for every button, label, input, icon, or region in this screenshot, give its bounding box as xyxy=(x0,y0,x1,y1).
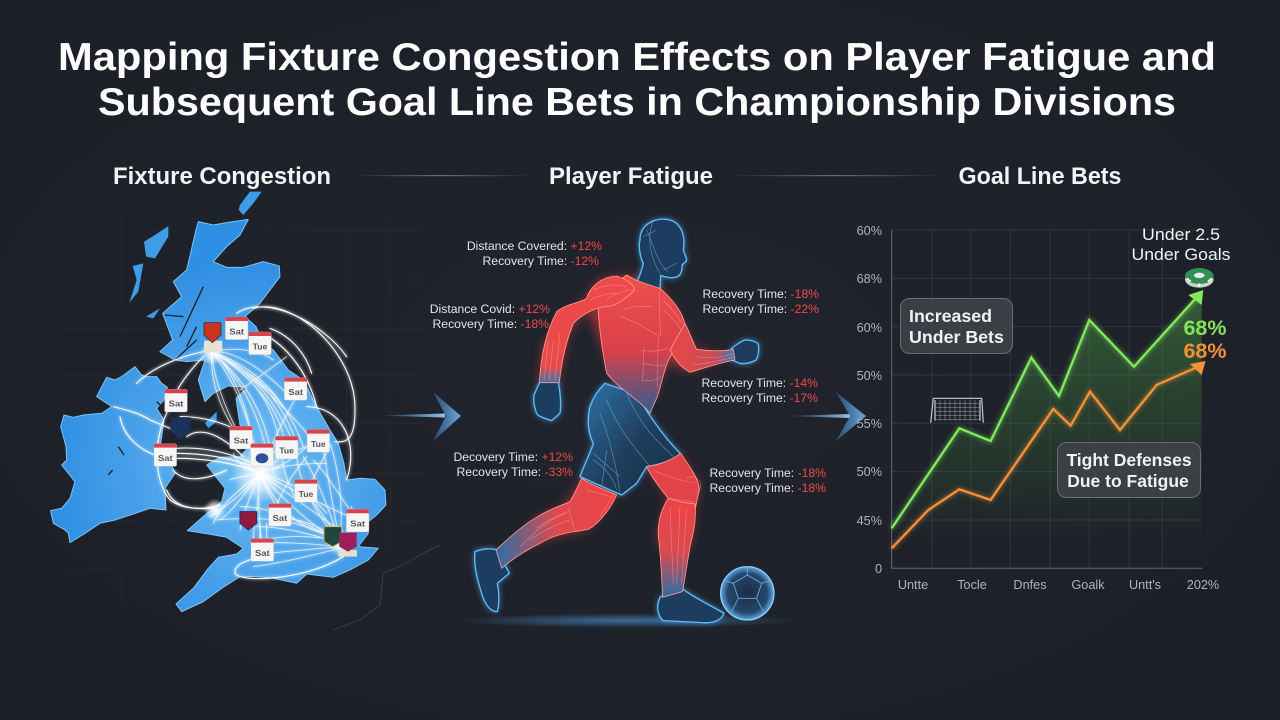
y axis labels: 55% xyxy=(857,417,882,431)
stat: mid right xyxy=(702,376,818,405)
y axis labels: 50% xyxy=(857,465,882,479)
faint lightning line xyxy=(333,545,440,630)
panel: goal line chart xyxy=(857,224,1230,592)
stat: lower right: Recovery Time: -18% xyxy=(710,481,826,495)
stat: mid left: Recovery Time: -18% xyxy=(432,317,549,331)
calendar markers: Sat xyxy=(350,520,365,529)
hub glows xyxy=(200,341,354,558)
x axis labels: Untte xyxy=(898,578,928,592)
y axis labels: 45% xyxy=(857,514,882,528)
stat: lower left: Decovery Time: +12% xyxy=(453,450,573,464)
title: Mapping Fixture Congestion Effects on Player Fatigue and xyxy=(58,36,1216,79)
arrow: map to runner xyxy=(378,392,461,441)
x axis labels xyxy=(898,578,1219,592)
stat: lower left: Recovery Time: -33% xyxy=(456,465,573,479)
chart grid xyxy=(892,230,1202,568)
callout: increased under bets: Under Bets xyxy=(909,327,1004,347)
x axis labels: Tocle xyxy=(957,578,987,592)
y axis labels: 0 xyxy=(875,562,882,576)
callout: increased under bets: Increased xyxy=(909,306,992,326)
calendar markers: Tue xyxy=(253,342,268,351)
stat: mid left xyxy=(430,302,550,331)
area under green line xyxy=(892,292,1202,543)
x axis labels: Untt's xyxy=(1129,578,1161,592)
callout: tight defenses: Due to Fatigue xyxy=(1067,471,1189,491)
calendar markers: Tue xyxy=(299,490,314,499)
muscle lines xyxy=(520,220,733,583)
arrow: runner to chart xyxy=(785,392,866,441)
stat: lower right: Recovery Time: -18% xyxy=(710,466,826,480)
stat: top left: Distance Covered: +12% xyxy=(467,239,602,253)
value: orange 68%: 68% xyxy=(1183,339,1227,363)
title: Subsequent Goal Line Bets in Championship Divisions xyxy=(98,81,1176,124)
icon: betting chip xyxy=(1185,268,1214,288)
red glow xyxy=(520,275,727,550)
stat: top right: Recovery Time: -22% xyxy=(702,302,819,316)
stat: top left: Recovery Time: -12% xyxy=(482,254,599,268)
y axis labels: 68% xyxy=(857,272,882,286)
map: hebrides xyxy=(129,192,262,428)
stat labels xyxy=(430,239,826,495)
callout: tight defenses: Tight Defenses xyxy=(1066,450,1192,470)
calendar markers: Tue xyxy=(311,440,326,449)
calendar markers: Sat xyxy=(158,454,173,463)
label: under 2.5 goals xyxy=(1132,226,1230,264)
red muscles xyxy=(496,275,735,597)
club badges xyxy=(171,323,357,557)
stat: lower left xyxy=(453,450,573,479)
y axis labels: 60% xyxy=(857,224,882,238)
label: under 2.5 goals: Under 2.5 xyxy=(1142,226,1220,244)
y axis labels: 60% xyxy=(857,321,882,335)
calendar markers: Sat xyxy=(255,549,270,558)
value: green 68%: 68% xyxy=(1183,316,1227,340)
calendar markers: Sat xyxy=(229,327,244,336)
floor glow xyxy=(453,613,800,628)
stat: top right xyxy=(702,287,819,316)
x axis labels: Dnfes xyxy=(1013,578,1047,592)
calendar markers: Tue xyxy=(279,447,295,456)
calendar markers: Sat xyxy=(273,514,288,523)
line glow xyxy=(892,297,1198,548)
y axis labels xyxy=(857,224,882,576)
calendar markers: Sat xyxy=(169,400,184,409)
callout: tight defenses xyxy=(1058,442,1200,498)
connection lines xyxy=(113,307,355,579)
x axis labels: 202% xyxy=(1187,578,1219,592)
stat: mid left: Distance Covid: +12% xyxy=(430,302,550,316)
map: coast inlets xyxy=(108,287,203,475)
calendar markers: Sat xyxy=(234,437,249,446)
panel: fixture congestion map xyxy=(51,192,440,630)
x axis labels: Goalk xyxy=(1071,578,1105,592)
heading: player fatigue: Player Fatigue xyxy=(549,163,713,190)
y axis labels: 50% xyxy=(857,369,882,383)
fan lines from hubs xyxy=(210,349,357,567)
label: under 2.5 goals: Under Goals xyxy=(1132,246,1230,264)
title xyxy=(58,36,1216,124)
stat: lower right xyxy=(710,466,826,495)
calendar markers: Sat xyxy=(288,388,303,397)
callout: increased under bets xyxy=(900,298,1012,354)
heading: goal line bets: Goal Line Bets xyxy=(958,163,1122,190)
panel: player fatigue figure xyxy=(453,219,800,628)
icon: goal xyxy=(931,398,983,423)
ball xyxy=(721,567,774,620)
green line xyxy=(892,290,1203,528)
stat: mid right: Recovery Time: -17% xyxy=(702,391,818,405)
stat: mid right: Recovery Time: -14% xyxy=(702,376,818,390)
heading: fixture congestion: Fixture Congestion xyxy=(113,163,331,190)
orange line xyxy=(892,361,1206,548)
blue silhouette xyxy=(475,219,759,623)
stat: top left xyxy=(467,239,602,268)
map: ireland xyxy=(51,367,175,543)
calendar markers xyxy=(154,317,369,561)
stat: top right: Recovery Time: -18% xyxy=(702,287,819,301)
map: great britain xyxy=(160,219,386,612)
